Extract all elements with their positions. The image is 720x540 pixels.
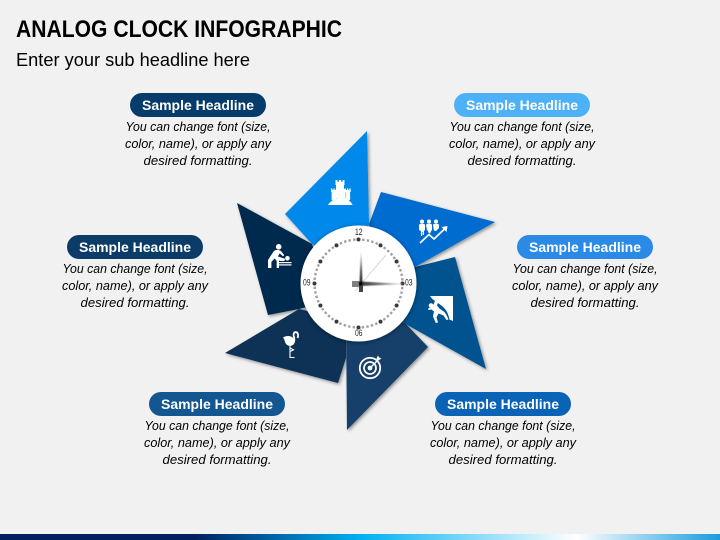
hour hand tail xyxy=(359,284,363,292)
blade: blue with team growth icon xyxy=(369,192,495,270)
blade: light blue with castle icon xyxy=(285,131,369,260)
clock xyxy=(300,226,416,342)
blade: slate blue with target icon xyxy=(346,320,428,430)
text block: middle left xyxy=(62,235,210,310)
text block: top right: Sample Headline xyxy=(466,97,578,113)
text block: top left: Sample Headline xyxy=(142,97,254,113)
text block: bottom right: Sample Headline xyxy=(447,396,559,412)
sub headline: Enter your sub headline here xyxy=(16,50,250,70)
text block: bottom right: You can change font (size, xyxy=(430,418,576,433)
hub xyxy=(359,282,363,286)
blade: mid blue with climber icon xyxy=(395,257,486,369)
icon: target with arrow xyxy=(360,356,382,378)
text block: top left xyxy=(125,93,273,168)
text block: top right: desired formatting. xyxy=(468,153,576,168)
text block: top left: desired formatting. xyxy=(144,153,252,168)
hour numerals: 06 xyxy=(355,328,362,338)
blade: navy with diaper-changing icon xyxy=(237,203,330,315)
blade: navy with flamingo icon xyxy=(225,309,346,383)
text block: middle left: desired formatting. xyxy=(80,295,190,310)
hour numerals: 09 xyxy=(303,278,310,288)
hour dots xyxy=(312,238,404,330)
hour hand xyxy=(360,251,362,284)
icon: sand castle xyxy=(328,180,352,205)
text block: bottom right xyxy=(430,392,578,467)
second hand xyxy=(355,255,386,291)
minute hand xyxy=(360,282,402,286)
text block: middle left: You can change font (size, xyxy=(62,261,208,276)
text block: bottom left xyxy=(144,392,292,467)
minute tick ring xyxy=(314,240,402,328)
minute hand tail xyxy=(352,281,361,287)
hour numerals: 03 xyxy=(405,278,412,288)
icon: team growth arrow xyxy=(419,220,448,243)
text block: bottom left: color, name), or apply any xyxy=(144,435,292,450)
text block: top left: color, name), or apply any xyxy=(125,136,273,151)
text block: bottom left: You can change font (size, xyxy=(144,418,290,433)
icon: climber on rock wall xyxy=(428,296,453,323)
text block: top right: color, name), or apply any xyxy=(449,136,597,151)
text block: middle right: Sample Headline xyxy=(529,239,641,255)
footer gradient bar xyxy=(0,534,720,540)
text block: top left: You can change font (size, xyxy=(126,119,270,134)
text block: middle right: You can change font (size, xyxy=(512,261,658,276)
text block: top right: You can change font (size, xyxy=(450,119,594,134)
text block: bottom left: desired formatting. xyxy=(162,452,272,467)
text block: bottom right: desired formatting. xyxy=(448,452,558,467)
text block: top right xyxy=(449,93,597,168)
icon: parent changing baby xyxy=(268,244,292,268)
title: ANALOG CLOCK INFOGRAPHIC xyxy=(16,16,342,43)
clock face xyxy=(300,226,416,342)
text block: bottom right: color, name), or apply any xyxy=(430,435,578,450)
icon: flamingo xyxy=(283,332,298,358)
text block: middle right xyxy=(512,235,660,310)
text block: middle right: color, name), or apply any xyxy=(512,278,660,293)
hour numerals xyxy=(303,227,412,338)
text block: bottom left: Sample Headline xyxy=(161,396,273,412)
text block: middle right: desired formatting. xyxy=(530,295,640,310)
hour numerals: 12 xyxy=(355,227,362,237)
text block: middle left: color, name), or apply any xyxy=(62,278,210,293)
text block: middle left: Sample Headline xyxy=(79,239,191,255)
